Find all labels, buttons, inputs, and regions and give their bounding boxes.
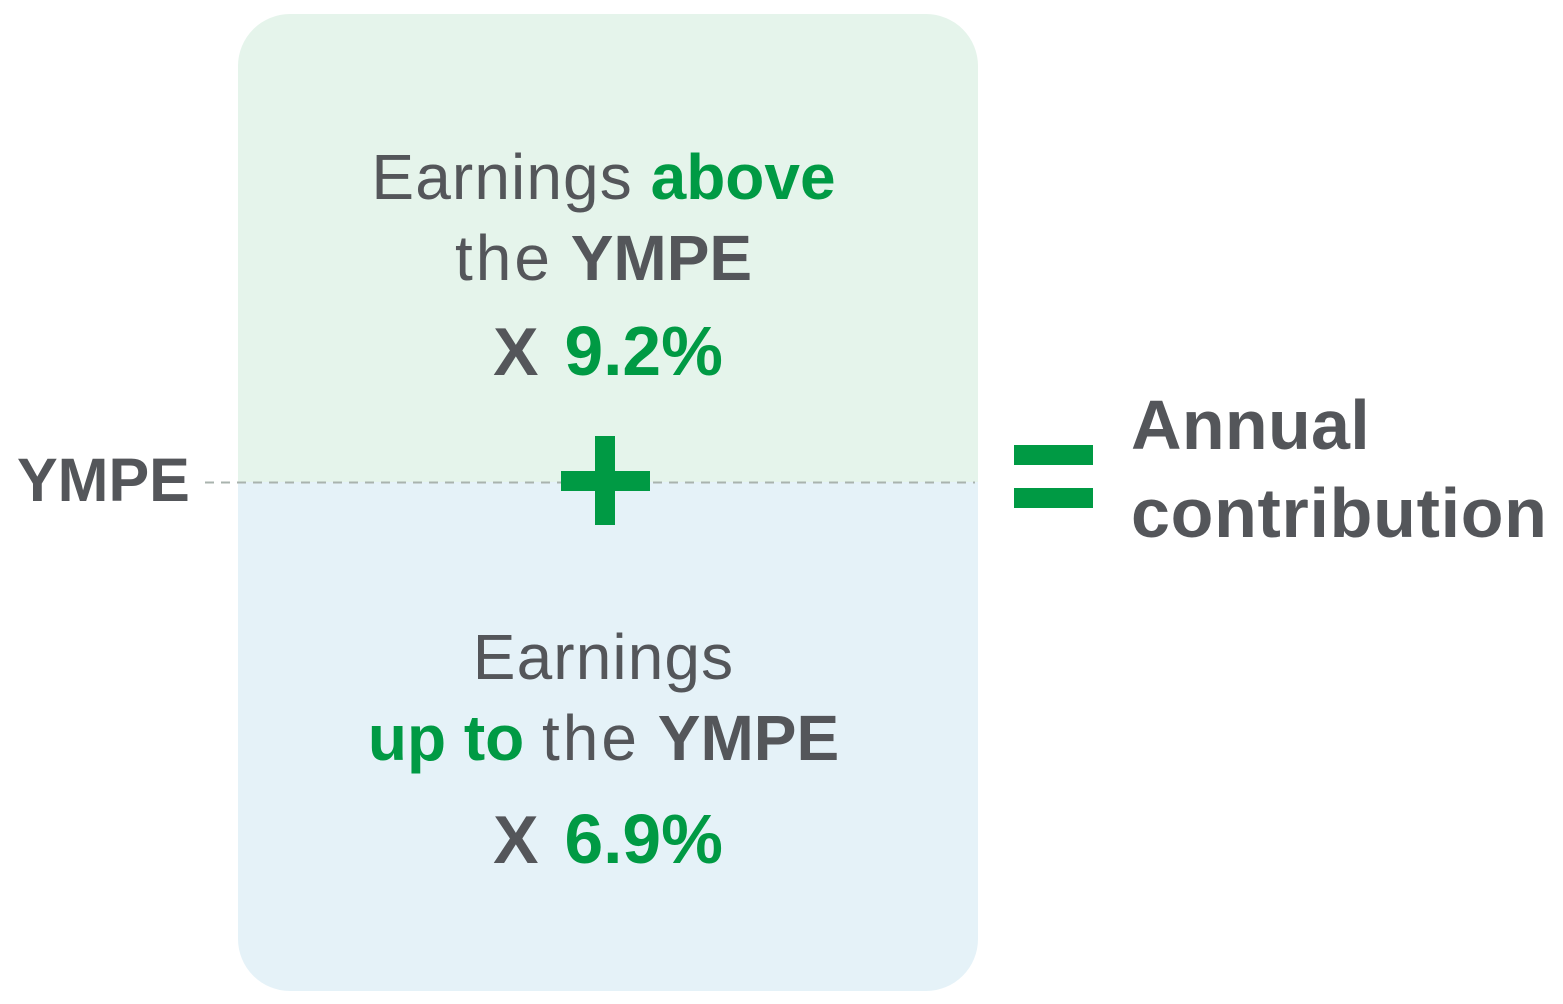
panel: contribution formula: [238, 14, 978, 991]
text: earnings above: Earnings above: [371, 141, 836, 213]
icon: equals sign: [1014, 445, 1093, 508]
result: annual contribution: contribution: [1131, 474, 1548, 552]
text: up to the YMPE: up to the YMPE: [368, 702, 839, 774]
label: YMPE: YMPE: [17, 446, 190, 514]
result: annual contribution: Annual: [1131, 386, 1370, 464]
text: x 6.9%: X 6.9%: [493, 800, 723, 878]
text: earnings: Earnings: [473, 621, 734, 693]
panel: earnings above YMPE: [238, 14, 978, 482]
text: x 9.2%: X 9.2%: [493, 312, 723, 390]
text: the YMPE: the YMPE: [455, 222, 752, 294]
panel: earnings up to YMPE: [238, 482, 978, 991]
dashed YMPE line: [205, 482, 975, 484]
icon: plus sign: [561, 436, 650, 525]
result: annual contribution: [1131, 386, 1548, 552]
